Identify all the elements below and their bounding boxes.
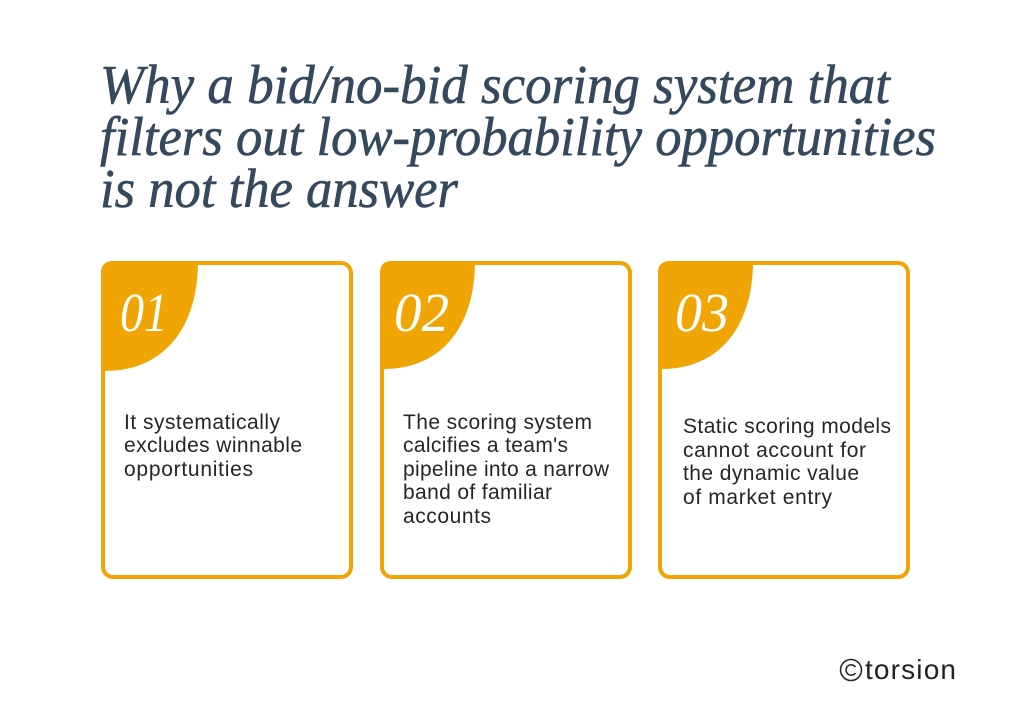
text: card 03 body: Static scoring models [683, 415, 891, 438]
text: card 02 body: The scoring system [403, 411, 592, 434]
panel: card 02 [380, 261, 630, 577]
text: card 02 body: pipeline into a narrow [403, 458, 610, 481]
text: card 02 body: band of familiar [403, 481, 552, 504]
text: card 01 body: opportunities [124, 458, 253, 481]
text: card 03 body: cannot account for [683, 439, 866, 462]
badge: quarter circle 03 [658, 261, 753, 369]
title [100, 54, 936, 219]
badge: quarter circle 02 [380, 261, 475, 369]
panel: card 01 [101, 261, 351, 577]
number 03: 03 [675, 282, 729, 343]
title: is not the answer [100, 158, 459, 219]
text: card 02 body: accounts [403, 505, 491, 528]
text: card 03 body: the dynamic value [683, 462, 859, 485]
badge: quarter circle 01 [101, 261, 198, 371]
text: card 01 body: excludes winnable [124, 434, 302, 457]
number 02: 02 [394, 282, 449, 343]
text: card 02 body [403, 411, 610, 528]
text: card 01 body: It systematically [124, 411, 280, 434]
icon: copyright mark [840, 660, 862, 680]
text: card 03 body: of market entry [683, 486, 832, 509]
number 01: 01 [120, 282, 168, 343]
text: card 01 body [124, 411, 302, 481]
title: Why a bid/no-bid scoring system that [100, 54, 892, 115]
logo: torsion: torsion [865, 654, 956, 685]
panel: card 03 [658, 261, 908, 577]
text: card 03 body [683, 415, 891, 509]
text: card 02 body: calcifies a team's [403, 434, 568, 457]
title: filters out low-probability opportunities [100, 106, 936, 167]
